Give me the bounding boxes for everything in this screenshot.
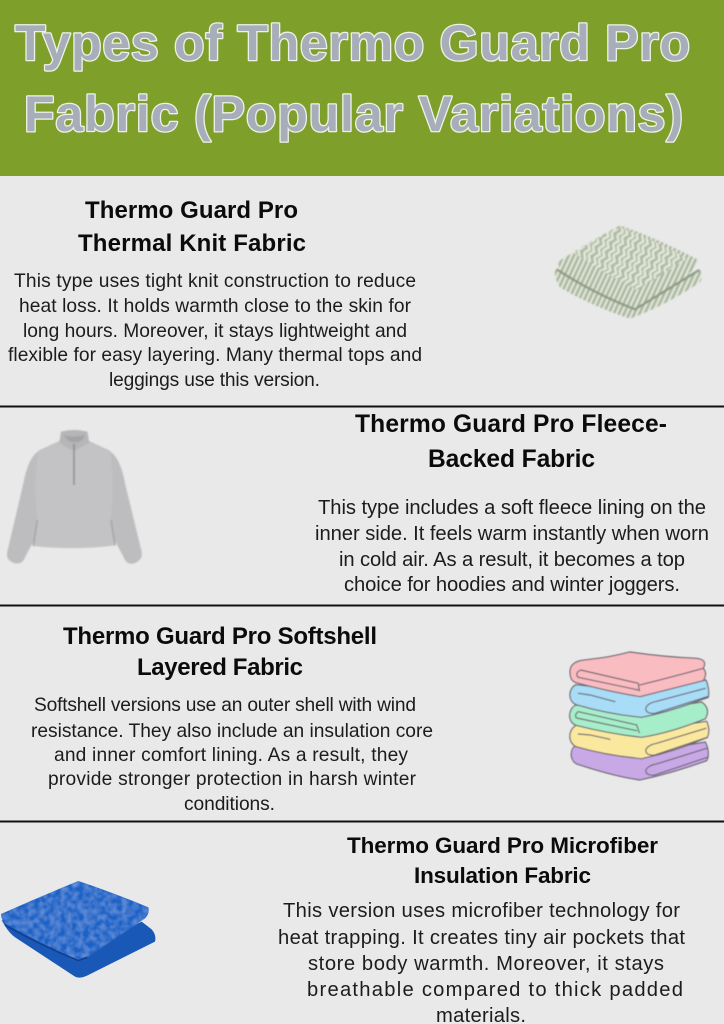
divider (0, 406, 724, 408)
text block: fleece-backed description (315, 497, 709, 596)
panel: thermal knit fabric (8, 197, 702, 391)
green layer (570, 702, 707, 737)
text block: thermal knit description: long hours. Moreover, it stays lightweight and (23, 321, 407, 342)
text block: fleece-backed description: choice for hoodies and winter joggers. (344, 574, 680, 596)
title banner (0, 0, 724, 176)
text block: fleece-backed description: in cold air. As a result, it becomes a top (339, 549, 685, 571)
text block: softshell description (31, 695, 433, 815)
icon: grey fleece pullover (7, 430, 142, 564)
heading: microfiber (347, 833, 658, 888)
heading: thermal knit: Thermal Knit Fabric (78, 230, 306, 257)
text block: softshell description: resistance. They also include an insulation core (31, 721, 433, 742)
blue layer (570, 680, 709, 717)
text block: softshell description: Softshell versions use an outer shell with wind (34, 695, 416, 716)
text block: fleece-backed description: This type includes a soft fleece lining on the (318, 497, 706, 519)
text block: softshell description: and inner comfort lining. As a result, they (54, 745, 408, 766)
pink layer (570, 652, 706, 697)
heading: microfiber: Thermo Guard Pro Microfiber (347, 833, 658, 858)
text block: microfiber description: heat trapping. It creates tiny air pockets that (278, 927, 685, 949)
divider (0, 604, 724, 606)
heading: thermal knit: Thermo Guard Pro (85, 197, 298, 224)
title: Types of Thermo Guard Pro (15, 15, 690, 71)
panel: fleece-backed fabric (7, 411, 709, 596)
text block: microfiber description: This version uses microfiber technology for (283, 900, 680, 922)
yellow layer (570, 721, 709, 759)
heading: softshell: Layered Fabric (137, 654, 303, 681)
panel: softshell layered fabric (31, 623, 709, 815)
text block: thermal knit description (8, 271, 422, 391)
text block: thermal knit description: flexible for easy layering. Many thermal tops and (8, 345, 422, 366)
text block: fleece-backed description: inner side. It feels warm instantly when worn (315, 523, 709, 545)
title (15, 15, 690, 142)
panel: microfiber insulation fabric (1, 833, 685, 1024)
heading: fleece-backed (355, 411, 667, 473)
divider (0, 820, 724, 822)
icon: stack of pastel folded fabrics (570, 652, 709, 780)
icon: folded blue microfiber towel (1, 881, 155, 978)
purple layer (571, 742, 708, 780)
text block: microfiber description (278, 900, 685, 1024)
text block: thermal knit description: heat loss. It holds warmth close to the skin for (19, 296, 412, 317)
text block: thermal knit description: leggings use this version. (109, 370, 320, 391)
text block: softshell description: conditions. (184, 794, 275, 815)
heading: fleece-backed: Thermo Guard Pro Fleece- (355, 411, 667, 438)
text block: softshell description: provide stronger protection in harsh winter (48, 769, 417, 790)
heading: fleece-backed: Backed Fabric (428, 446, 595, 473)
text block: thermal knit description: This type uses tight knit construction to reduce (14, 271, 416, 292)
heading: softshell: Thermo Guard Pro Softshell (63, 623, 377, 650)
text block: microfiber description: store body warmth. Moreover, it stays (308, 953, 664, 975)
title: Fabric (Popular Variations) (24, 86, 683, 142)
heading: softshell (63, 623, 377, 681)
text block: microfiber description: breathable compared to thick padded (307, 979, 683, 1001)
heading: thermal knit (78, 197, 306, 257)
icon: folded knit blanket (555, 225, 702, 319)
heading: microfiber: Insulation Fabric (414, 863, 591, 888)
